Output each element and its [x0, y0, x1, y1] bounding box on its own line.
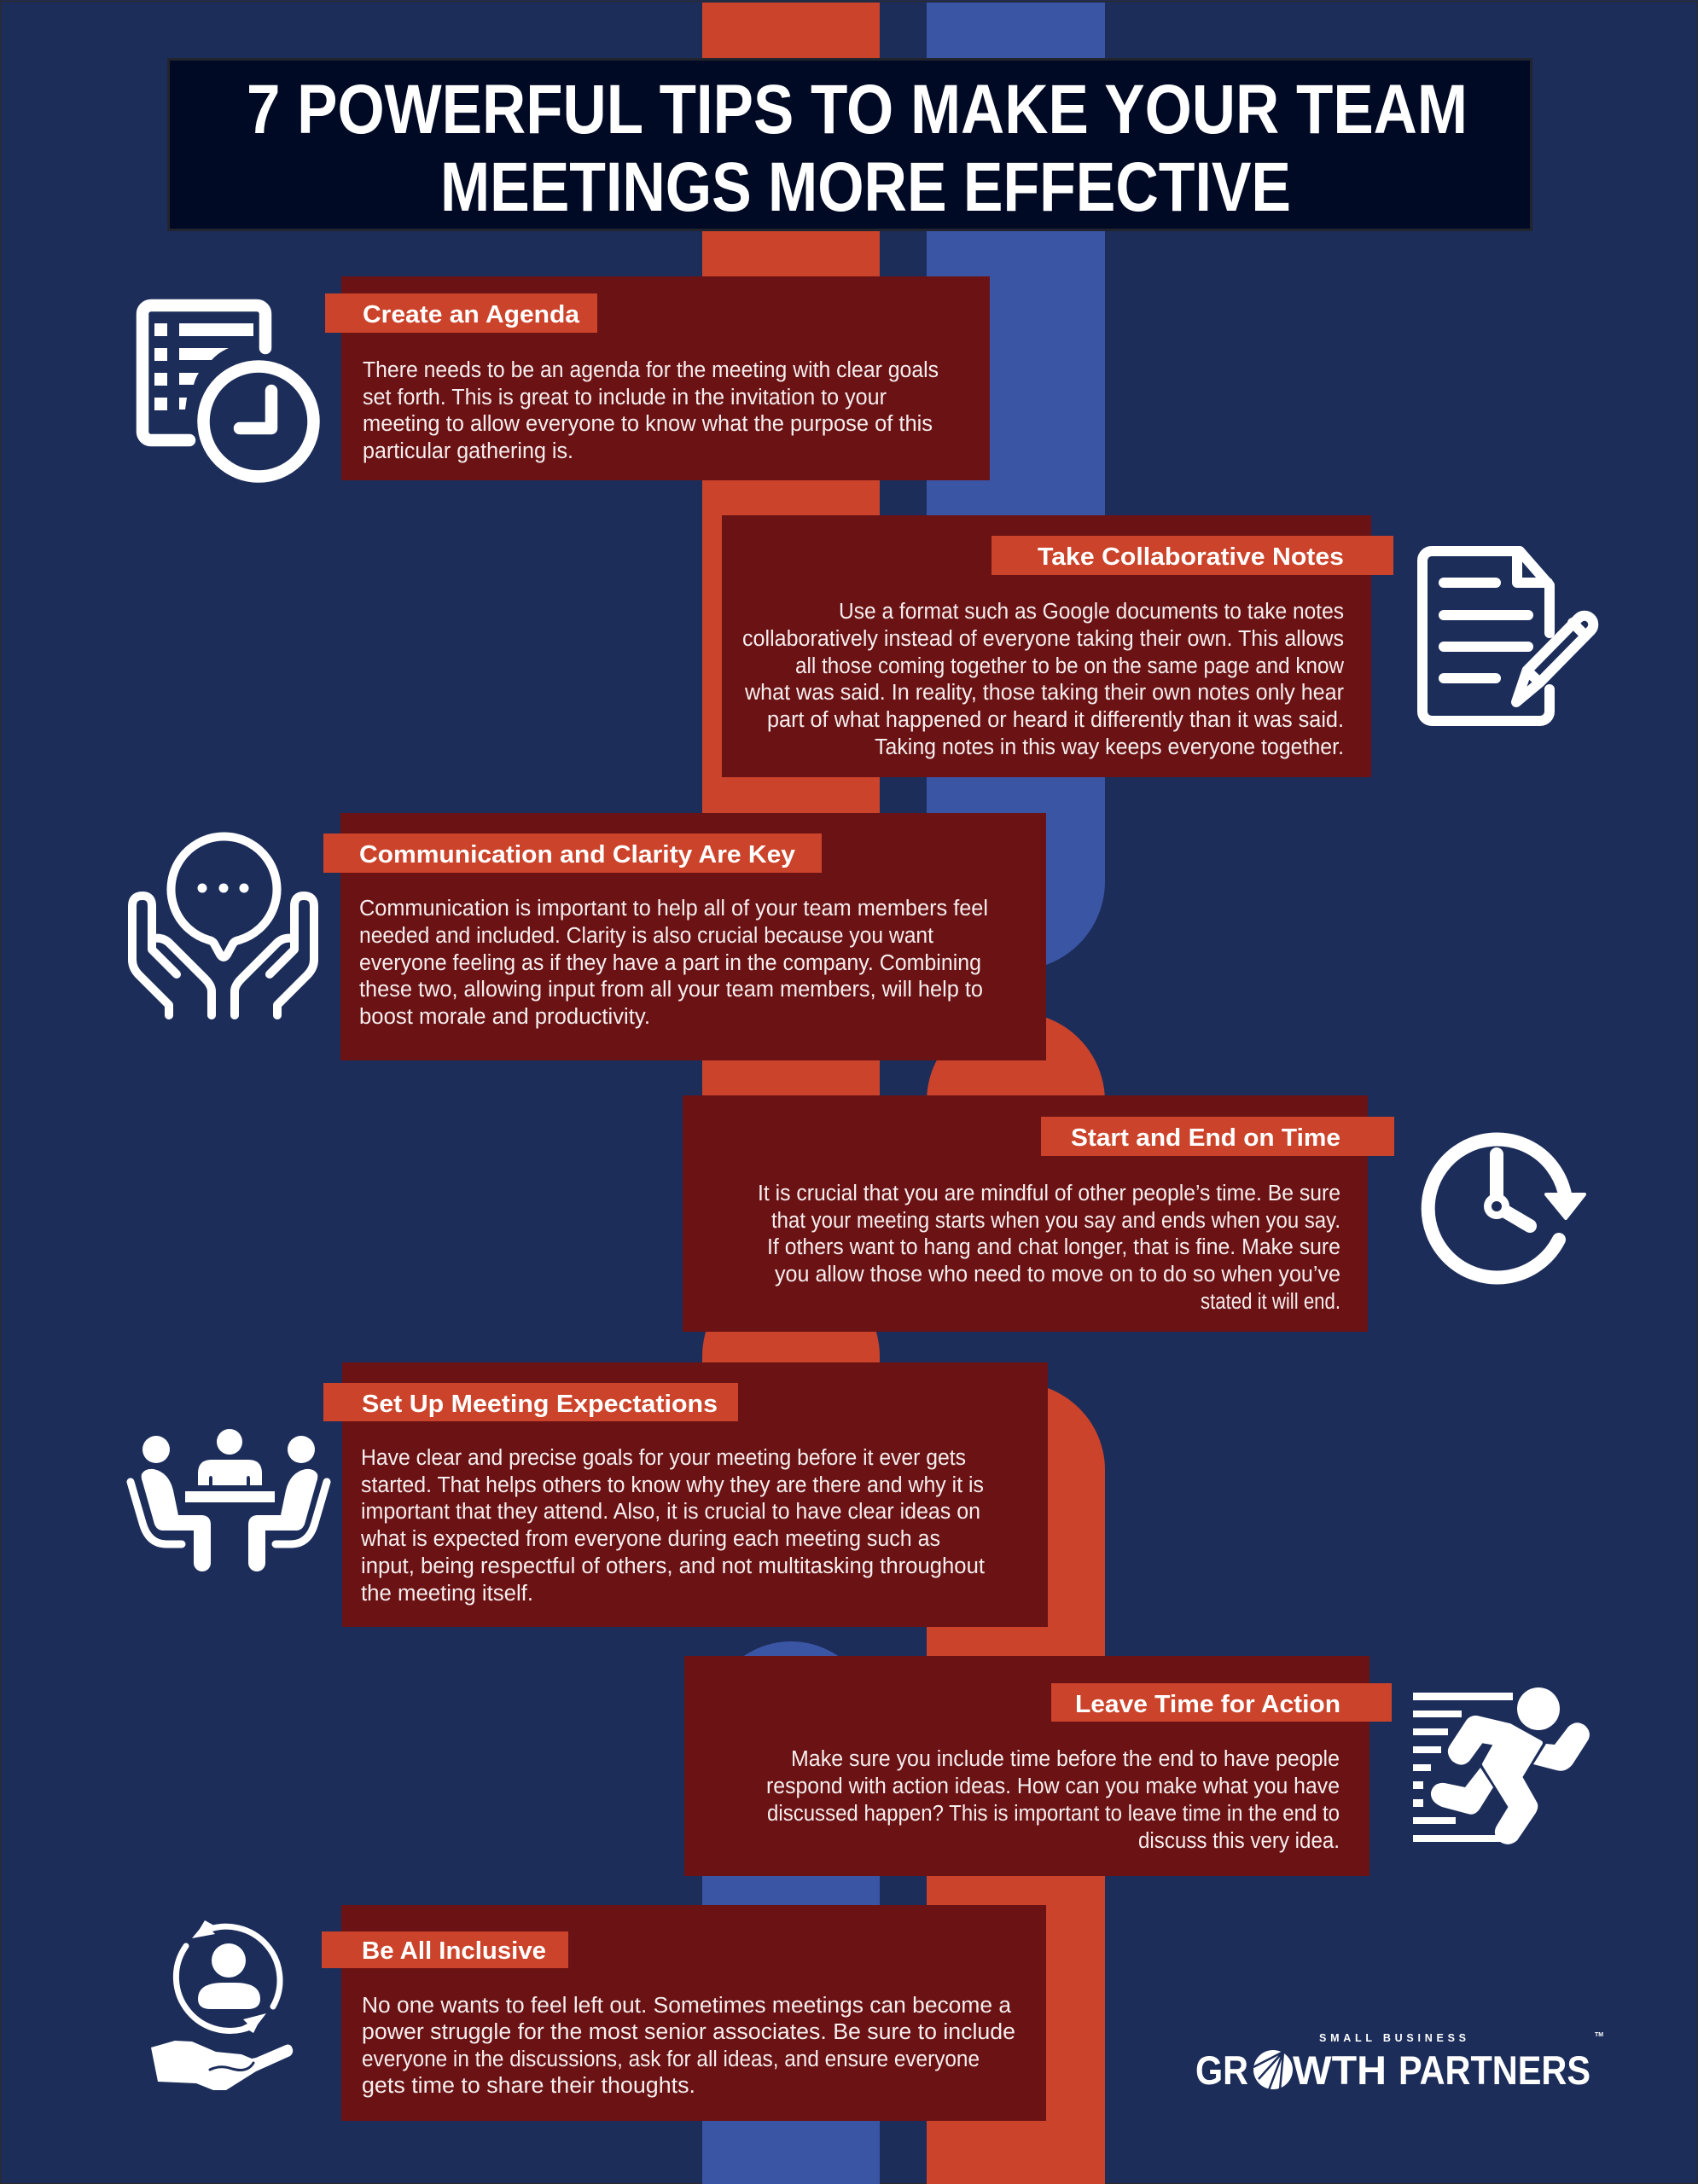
logo: small business growth partners: SMALL BUSINESS — [1319, 2032, 1466, 2044]
panel: create an agenda: particular gathering is. — [363, 439, 573, 463]
panel: take collaborative notes: collaboratively instead of everyone taking their own. This allows — [742, 627, 1344, 651]
right column red dome — [927, 1012, 1105, 1280]
panel: start and end on time: you allow those who need to move on to do so when you’ve — [775, 1263, 1340, 1287]
panel: create an agenda: Create an Agenda — [363, 301, 580, 328]
panel: start and end on time: If others want to hang and chat longer, that is fine. Make sure — [767, 1235, 1340, 1259]
panel: set up meeting expectations: input, being respectful of others, and not multitasking throughout — [361, 1554, 985, 1578]
logo: small business growth partners: TM — [1595, 2032, 1603, 2038]
panel: be all inclusive: everyone in the discussions, ask for all ideas, and ensure everyone — [362, 2048, 980, 2071]
title — [169, 60, 1531, 230]
panel: communication and clarity are key: Communication and Clarity Are Key — [359, 841, 795, 868]
logo: small business growth partners — [1195, 2032, 1603, 2093]
panel: create an agenda: meeting to allow everyone to know what the purpose of this — [363, 412, 933, 436]
panel: leave time for action: discussed happen? This is important to leave time in the end to — [767, 1802, 1340, 1826]
icon: running person — [1413, 1687, 1590, 1842]
panel: communication and clarity are key: these two, allowing input from all your team members, will help to — [359, 978, 983, 1002]
icon: document and pencil — [1422, 551, 1593, 721]
icon: team around table — [131, 1429, 327, 1571]
panel: take collaborative notes: part of what happened or heard it differently than it was said. — [767, 708, 1344, 732]
panel: be all inclusive: Be All Inclusive — [362, 1937, 546, 1965]
panel: set up meeting expectations: the meeting itself. — [361, 1582, 533, 1606]
panel: communication and clarity are key: Communication is important to help all of your team members feel — [359, 897, 988, 921]
panel: communication and clarity are key — [323, 813, 1046, 1060]
panel: start and end on time: It is crucial that you are mindful of other people’s time. Be sure — [758, 1182, 1340, 1205]
panel: set up meeting expectations: Set Up Meeting Expectations — [362, 1391, 718, 1418]
panel: set up meeting expectations: Have clear and precise goals for your meeting before it ever gets — [361, 1446, 966, 1470]
panel: set up meeting expectations: started. That helps others to know why they are there and why it is — [361, 1473, 984, 1497]
left column red dome — [702, 1268, 880, 1450]
panel: take collaborative notes — [722, 515, 1393, 777]
panel: leave time for action: Leave Time for Action — [1075, 1691, 1340, 1718]
panel: take collaborative notes: all those coming together to be on the same page and know — [795, 654, 1345, 678]
panel: create an agenda — [325, 276, 990, 480]
panel: create an agenda: set forth. This is great to include in the invitation to your — [363, 386, 887, 410]
panel: take collaborative notes: what was said. In reality, those taking their own notes only hear — [744, 681, 1344, 705]
logo: small business growth partners: WTH — [1293, 2048, 1387, 2093]
panel: start and end on time: stated it will end. — [1201, 1290, 1340, 1314]
icon: person in cycle over hand — [151, 1920, 293, 2090]
panel: start and end on time — [683, 1095, 1394, 1332]
panel: start and end on time: that your meeting starts when you say and ends when you say. — [771, 1209, 1340, 1233]
panel: create an agenda: There needs to be an agenda for the meeting with clear goals — [363, 358, 939, 382]
logo: small business growth partners: GR — [1195, 2048, 1248, 2093]
icon: clock with arrow — [1428, 1139, 1585, 1277]
panel: communication and clarity are key: needed and included. Clarity is also crucial because you want — [359, 924, 933, 948]
panel: be all inclusive — [322, 1905, 1046, 2121]
panel: leave time for action: discuss this very idea. — [1138, 1829, 1340, 1853]
panel: communication and clarity are key: boost morale and productivity. — [359, 1005, 650, 1029]
panel: be all inclusive: gets time to share their thoughts. — [362, 2074, 695, 2098]
panel: take collaborative notes: Taking notes in this way keeps everyone together. — [875, 735, 1344, 759]
panel: take collaborative notes: Use a format such as Google documents to take notes — [839, 600, 1344, 624]
logo: small business growth partners: PARTNERS — [1399, 2048, 1590, 2093]
panel: leave time for action: Make sure you include time before the end to have people — [791, 1747, 1340, 1771]
panel: set up meeting expectations: important that they attend. Also, it is crucial to have clear ideas on — [361, 1500, 980, 1524]
right column blue — [927, 3, 1105, 970]
panel: leave time for action — [684, 1656, 1392, 1876]
panel: be all inclusive: No one wants to feel left out. Sometimes meetings can become a — [362, 1994, 1012, 2018]
panel: take collaborative notes: Take Collaborative Notes — [1038, 543, 1344, 571]
title: MEETINGS MORE EFFECTIVE — [440, 148, 1291, 226]
left column red — [702, 3, 880, 1197]
panel: communication and clarity are key: everyone feeling as if they have a part in the company. Combining — [359, 951, 981, 975]
left column blue — [702, 1641, 880, 2184]
title: 7 POWERFUL TIPS TO MAKE YOUR TEAM — [247, 71, 1468, 148]
panel: set up meeting expectations: what is expected from everyone during each meeting such as — [360, 1527, 940, 1551]
panel: leave time for action: respond with action ideas. How can you make what you have — [766, 1774, 1340, 1798]
icon: hands with speech bubble — [132, 837, 314, 1015]
icon: agenda and clock — [142, 305, 314, 476]
panel: be all inclusive: power struggle for the most senior associates. Be sure to include — [362, 2020, 1015, 2044]
panel: set up meeting expectations — [323, 1362, 1048, 1627]
right column red lower — [927, 1382, 1105, 2184]
background ribbon columns — [702, 3, 1105, 2184]
panel: start and end on time: Start and End on Time — [1071, 1124, 1340, 1152]
